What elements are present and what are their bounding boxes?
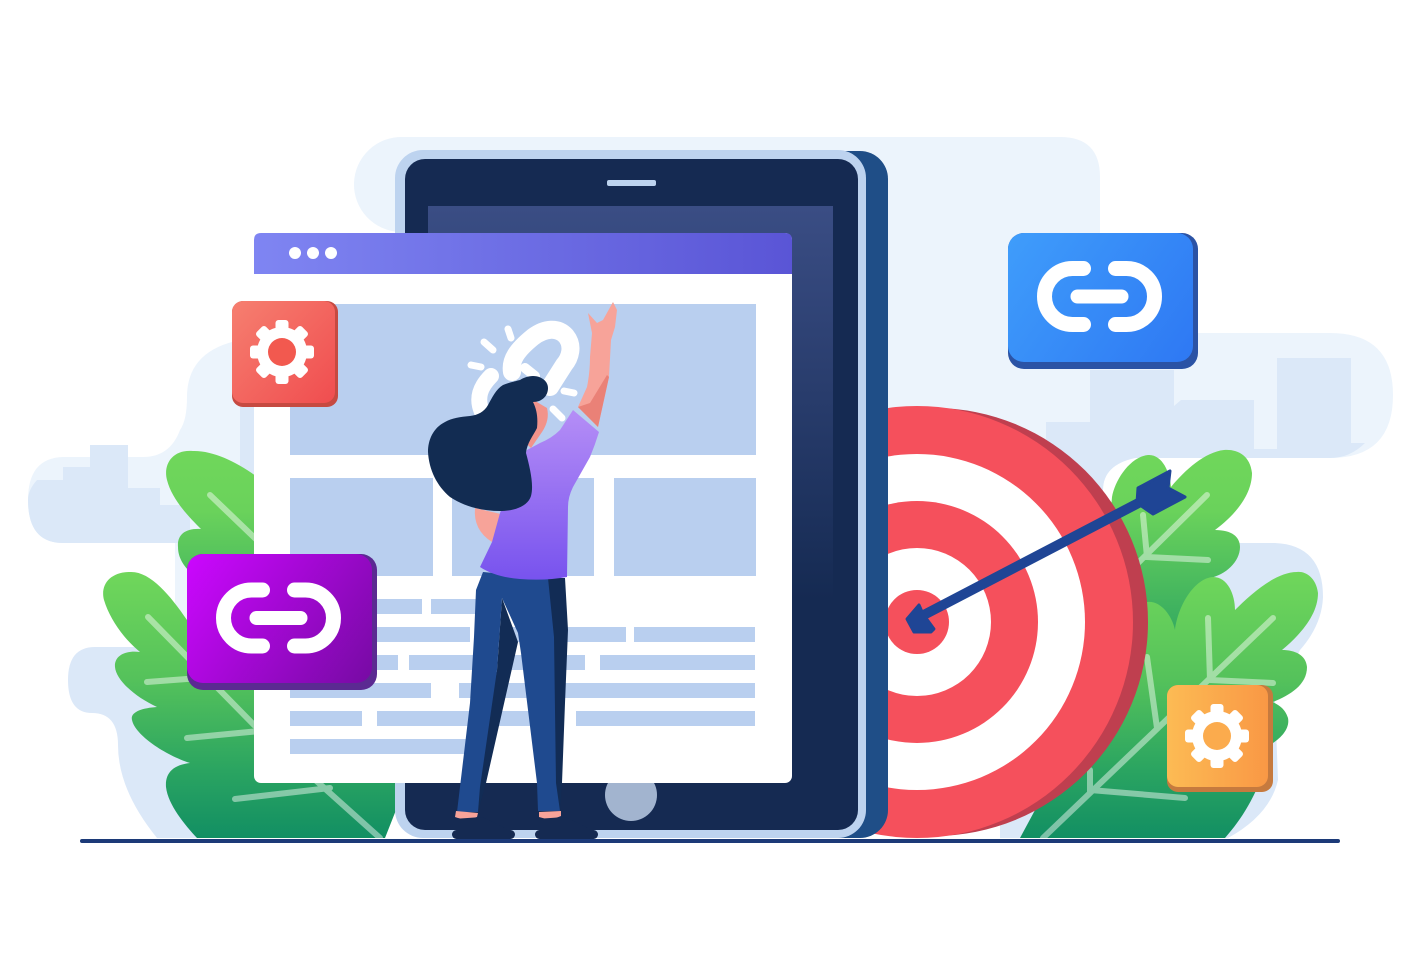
pants <box>457 572 560 812</box>
tablet body <box>405 159 858 830</box>
home button <box>605 769 657 821</box>
card edge <box>187 554 377 690</box>
card: orange gear <box>1167 685 1273 792</box>
content blocks <box>290 478 756 576</box>
target rim <box>720 408 1148 836</box>
tablet screen <box>428 206 833 783</box>
card: purple link <box>187 554 377 690</box>
background cloud shapes <box>28 137 1393 838</box>
hero image block <box>290 304 756 455</box>
hair <box>428 376 548 511</box>
shoes <box>452 817 598 839</box>
ankles <box>455 811 561 819</box>
ground line <box>80 839 1340 843</box>
neck <box>522 398 548 448</box>
gear icon <box>250 320 314 384</box>
window title bar <box>254 233 792 274</box>
pants dark parts <box>470 578 568 812</box>
text lines <box>290 599 755 754</box>
back leaf right <box>1100 450 1252 640</box>
card face <box>1167 685 1268 787</box>
front leaf left <box>103 560 398 838</box>
shirt <box>480 410 599 580</box>
card edge <box>1008 233 1198 369</box>
left cloud <box>28 338 254 640</box>
card face <box>187 554 372 683</box>
arrow in target <box>907 471 1185 632</box>
card edge <box>1167 685 1273 792</box>
target rings <box>701 406 1133 838</box>
card face <box>232 301 335 403</box>
window body <box>254 233 792 783</box>
leaf veins right <box>1043 495 1273 838</box>
leaf veins left <box>147 495 380 838</box>
far arm <box>475 508 505 542</box>
broken chain icon <box>471 329 574 418</box>
card edge <box>232 301 338 407</box>
link icon <box>1044 268 1154 324</box>
left skyline <box>28 400 254 600</box>
right skyline <box>1046 358 1365 600</box>
back leaf left <box>166 451 300 640</box>
tablet frame <box>395 150 866 838</box>
card: red gear <box>232 301 338 407</box>
tablet back <box>790 151 888 838</box>
lower link <box>479 376 491 412</box>
plant: left <box>103 451 398 838</box>
woman <box>428 302 617 839</box>
raised arm <box>578 302 617 427</box>
tablet <box>395 150 888 838</box>
browser window <box>254 233 792 783</box>
speaker <box>607 180 656 186</box>
sparks <box>471 329 574 418</box>
upper link <box>512 330 570 387</box>
card: blue link <box>1008 233 1198 369</box>
lower left blob <box>68 647 260 838</box>
front leaf right <box>1020 572 1318 838</box>
arrow fletching <box>1137 471 1185 514</box>
link icon <box>224 590 334 646</box>
plant: right <box>1020 450 1318 838</box>
gear icon <box>1185 704 1249 768</box>
window dots <box>289 247 337 259</box>
target board <box>701 406 1148 838</box>
arrow head <box>907 605 934 632</box>
lower right blob <box>1000 543 1323 838</box>
card face <box>1008 233 1193 362</box>
upper right cloud <box>354 137 1393 600</box>
